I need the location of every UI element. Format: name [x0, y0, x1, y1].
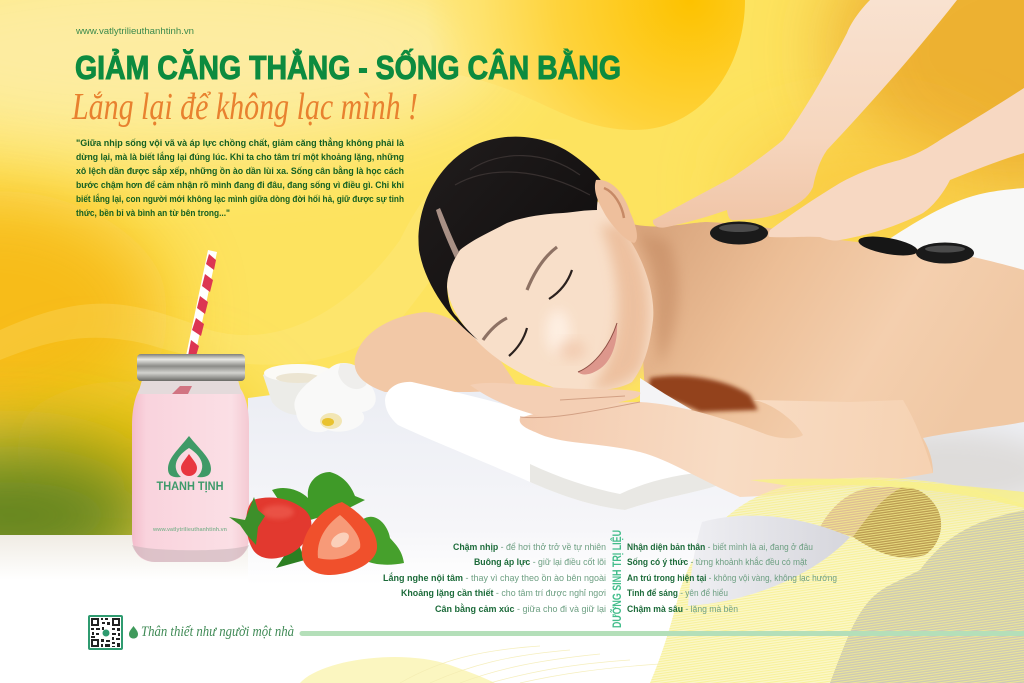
- list: right column: Sống có ý thức - từng khoảnh khắc đều có mặt: [627, 557, 807, 568]
- rolled towel: [385, 382, 722, 510]
- jar of strawberry drink: [132, 354, 249, 562]
- list: right column: An trú trong hiện tại - không vội vàng, không lạc hướng: [627, 573, 837, 584]
- net wave decoration: [300, 478, 1024, 683]
- jar lid: [137, 354, 245, 381]
- face: [447, 194, 653, 390]
- forearm: [520, 400, 933, 497]
- website url: www.vatlytrilieuthanhtinh.vn: [75, 26, 194, 37]
- hair: [418, 137, 602, 340]
- vertical label: DƯỠNG SINH TRỊ LIỆU: [611, 530, 624, 628]
- list: left column: Cân bằng cảm xúc - giữa cho đi và giữ lại: [435, 603, 606, 615]
- list: right column: Tỉnh để sáng - yên để hiểu: [627, 588, 728, 599]
- whole strawberry: [246, 497, 311, 559]
- list: right column: Nhận diện bản thân - biết mình là ai, đang ở đâu: [627, 542, 813, 553]
- body and back: [625, 222, 1024, 473]
- bowl and orchid: [263, 363, 376, 432]
- white sheet wedge: [640, 378, 692, 410]
- massage stones: [710, 222, 768, 244]
- intro paragraph: biết lắng lại, con người mới không lạc mình giữa dòng đời hối hả, giữ được sự tỉnh: [76, 193, 404, 204]
- intro paragraph: thức, bền bỉ và bình an từ bên trong...": [76, 208, 230, 218]
- left arm behind head: [355, 312, 520, 392]
- intro paragraph: bước chậm hơn để cảm nhận rõ mình đang đi đâu, đang sống vì điều gì. Chỉ khi: [76, 180, 404, 190]
- list: left column: Chậm nhịp - để hơi thở trở về tự nhiên: [453, 542, 606, 553]
- cut strawberry: [302, 502, 377, 575]
- intro paragraph: dừng lại, mà là biết lắng lại đúng lúc. Khi ta cho tâm trí một khoảng lặng, những: [76, 151, 404, 162]
- hands under chin: [470, 383, 640, 417]
- ear: [595, 180, 637, 243]
- floor and mattress: [0, 378, 1024, 683]
- title: GIẢM CĂNG THẲNG - SỐNG CÂN BẰNG: [75, 48, 621, 86]
- list: left column: Lắng nghe nội tâm - thay vì chạy theo ồn ào bên ngoài: [383, 572, 606, 584]
- list: left column: [383, 542, 606, 615]
- intro paragraph: [76, 137, 405, 218]
- brand name: THANH TỊNH: [156, 479, 224, 493]
- icon: orchid flower: [294, 363, 376, 432]
- strawberries: [229, 472, 404, 575]
- slogan: Thân thiết như người một nhà: [141, 624, 294, 640]
- list: left column: Buông áp lực - giữ lại điều cốt lõi: [474, 557, 606, 568]
- eyes and eyebrows: [527, 247, 557, 290]
- neck shadow: [640, 235, 678, 365]
- list: left column: Khoảng lặng cần thiết - cho tâm trí được nghỉ ngơi: [401, 588, 606, 599]
- woman lying on massage table: [355, 0, 1024, 510]
- leaves: [272, 472, 365, 520]
- icon: green drop: [129, 626, 138, 638]
- jar website: www.vatlytrilieuthanhtinh.vn: [152, 527, 227, 533]
- intro paragraph: xô lệch dần được sắp xếp, những ồn ào dần lùi xa. Sống cân bằng là học cách: [76, 165, 404, 176]
- list: right column: [627, 542, 837, 615]
- glass body: [132, 388, 249, 562]
- upper towel: [880, 188, 1024, 280]
- QR code: [88, 615, 123, 650]
- chest shadow: [648, 376, 758, 412]
- script subtitle: Lắng lại để không lạc mình !: [71, 86, 418, 128]
- therapist arm right: [768, 88, 1024, 241]
- list: right column: Chậm mà sâu - lặng mà bền: [627, 604, 738, 615]
- lips: [578, 323, 617, 374]
- straw: [186, 250, 217, 356]
- therapist arm left: [653, 0, 957, 228]
- logo: Thanh Tịnh: [168, 436, 211, 477]
- footer bar: [300, 631, 1024, 636]
- intro paragraph: "Giữa nhịp sống vội vã và áp lực chồng chất, giảm căng thẳng không phải là: [76, 137, 405, 148]
- mattress lens: [688, 516, 850, 606]
